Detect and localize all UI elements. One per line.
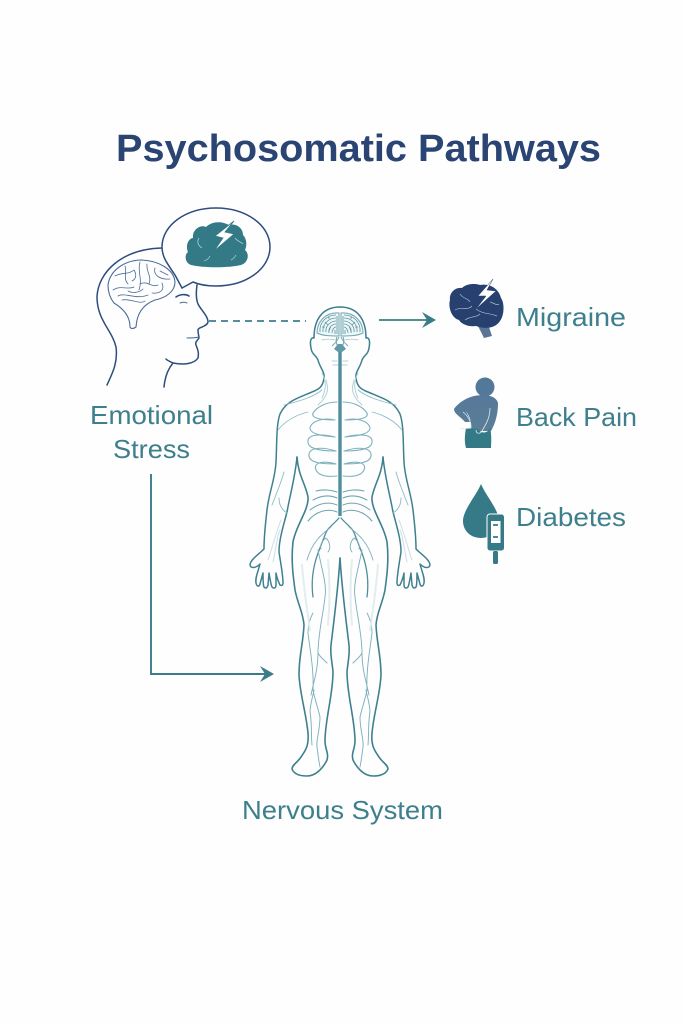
body left half	[250, 307, 340, 776]
side-view brain	[108, 260, 175, 328]
condition: diabetes	[463, 484, 626, 564]
facial features	[176, 295, 189, 297]
icon: brain with lightning	[449, 279, 504, 338]
label: Diabetes	[516, 502, 626, 532]
title: Psychosomatic Pathways	[116, 128, 601, 170]
dashed connector: head to body	[209, 320, 306, 322]
label: emotional stress: Emotional	[90, 400, 213, 430]
head profile with brain and thought bubble	[97, 208, 270, 387]
icon: person holding back	[454, 378, 498, 448]
spinal cord	[338, 346, 342, 516]
thought bubble	[162, 208, 270, 288]
condition: migraine	[449, 279, 626, 338]
label: emotional stress	[90, 400, 213, 464]
head brain left	[317, 313, 339, 350]
label: Back Pain	[516, 402, 637, 432]
brainstem	[334, 344, 346, 352]
head outline	[97, 248, 208, 387]
body right half	[340, 307, 430, 776]
head brain right	[341, 313, 363, 350]
label: nervous system: Nervous System	[242, 795, 443, 825]
label: emotional stress: Stress	[113, 434, 190, 464]
condition: back pain	[454, 378, 637, 448]
storm cloud with lightning bolt	[186, 221, 248, 267]
label: Migraine	[516, 302, 626, 332]
arrow: nervous system to conditions	[379, 312, 436, 328]
elbow arrow: stress to body	[151, 474, 274, 682]
human body nervous system figure	[250, 307, 430, 776]
icon: blood drop and glucose meter	[463, 484, 504, 564]
